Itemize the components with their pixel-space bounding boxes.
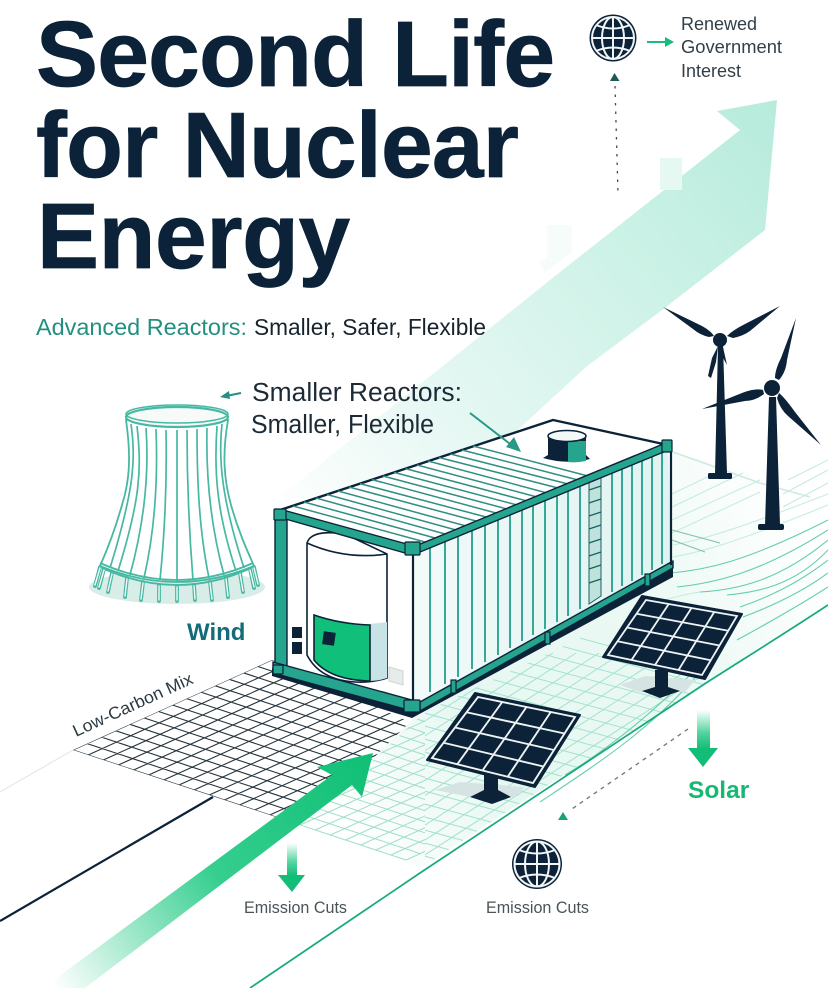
faint background arrow shaft xyxy=(660,158,682,190)
green fading grid xyxy=(300,718,425,860)
short dashes near container xyxy=(672,530,720,552)
tower ribs xyxy=(110,424,244,582)
renewed government interest label: Renewed xyxy=(681,14,757,34)
side wall xyxy=(412,445,671,707)
flowing field lines xyxy=(540,520,828,802)
subtitle: Smaller, Safer, Flexible xyxy=(254,314,486,340)
dark edges xyxy=(413,447,671,703)
title: for Nuclear xyxy=(36,93,518,197)
emission cuts label: right: Emission Cuts xyxy=(486,899,589,917)
hub xyxy=(713,333,727,347)
panel shadow xyxy=(435,782,525,797)
front wall xyxy=(278,513,412,707)
wind turbine: rear xyxy=(663,306,780,479)
panel face xyxy=(427,693,580,787)
roof xyxy=(280,420,668,548)
pale field stripes xyxy=(640,460,828,610)
arrow: toward cooling tower xyxy=(220,391,241,399)
hub xyxy=(764,380,780,396)
title: Second Life xyxy=(36,2,554,106)
panel cell lines xyxy=(432,697,575,783)
panel face xyxy=(603,596,742,679)
large pale growth arrow xyxy=(282,100,777,520)
black road line xyxy=(0,797,213,921)
tower legs xyxy=(95,567,258,601)
panel post and foot xyxy=(470,772,511,804)
small label plate xyxy=(389,667,403,685)
ground: low-carbon landscape xyxy=(0,452,828,988)
dark base xyxy=(272,562,673,718)
tower body xyxy=(100,420,254,582)
frame beams xyxy=(273,442,673,711)
solar label: Solar xyxy=(688,777,750,804)
renewed government interest label: Government xyxy=(681,37,782,57)
faint ground line xyxy=(0,750,73,792)
arrow: down to solar xyxy=(688,710,718,767)
arrow: globe to renewed interest xyxy=(647,37,674,47)
side wall ribs xyxy=(430,452,662,692)
roof ribs xyxy=(293,446,588,542)
faint background arrow fragment xyxy=(538,225,572,272)
green door xyxy=(314,615,370,681)
reactor cylinder xyxy=(307,533,387,682)
callout: smaller reactors: Smaller, Flexible xyxy=(251,411,434,439)
wide green grid xyxy=(425,638,703,860)
subtitle: Advanced Reactors: xyxy=(36,314,247,340)
globe icon: bottom xyxy=(512,839,562,889)
solar panel: front xyxy=(427,693,580,804)
arrow: down to emission cuts xyxy=(278,843,305,892)
panel post and foot xyxy=(642,670,680,698)
blades xyxy=(775,318,796,380)
dark low-carbon grid xyxy=(73,660,406,817)
faint cross line xyxy=(673,452,810,497)
tower base ring xyxy=(100,563,253,585)
shipping container small reactor xyxy=(272,420,673,718)
corner castings xyxy=(273,440,672,712)
title: Energy xyxy=(37,184,351,288)
globe icon: top xyxy=(590,14,636,62)
arrow: to container roof xyxy=(470,413,521,452)
renewed government interest label: Interest xyxy=(681,61,741,81)
tower rim xyxy=(126,407,228,427)
dashed arrow toward emission cuts xyxy=(558,729,688,820)
emission cuts label: left: Emission Cuts xyxy=(244,899,347,917)
solar panel: rear xyxy=(603,596,742,698)
cooling tower xyxy=(89,405,265,604)
ground tint xyxy=(300,452,828,868)
wind turbine: front xyxy=(702,318,821,530)
control squares xyxy=(292,627,302,638)
roof vent xyxy=(543,430,590,462)
dotted arrow up to globe xyxy=(610,73,620,194)
tower shadow xyxy=(89,570,265,604)
low-carbon mix label: Low-Carbon Mix xyxy=(70,669,196,741)
callout: smaller reactors: Smaller Reactors: xyxy=(252,379,462,407)
panel shadow xyxy=(620,676,695,692)
ladder panel xyxy=(589,472,601,604)
wind label: Wind xyxy=(187,619,245,646)
green ground edge xyxy=(250,605,828,988)
door window xyxy=(322,631,336,646)
panel cell lines xyxy=(608,600,737,675)
tower and base xyxy=(765,397,780,525)
cylinder shade xyxy=(370,622,387,681)
tower and base xyxy=(715,346,727,474)
big green arrow xyxy=(43,753,373,988)
blades xyxy=(663,307,714,337)
